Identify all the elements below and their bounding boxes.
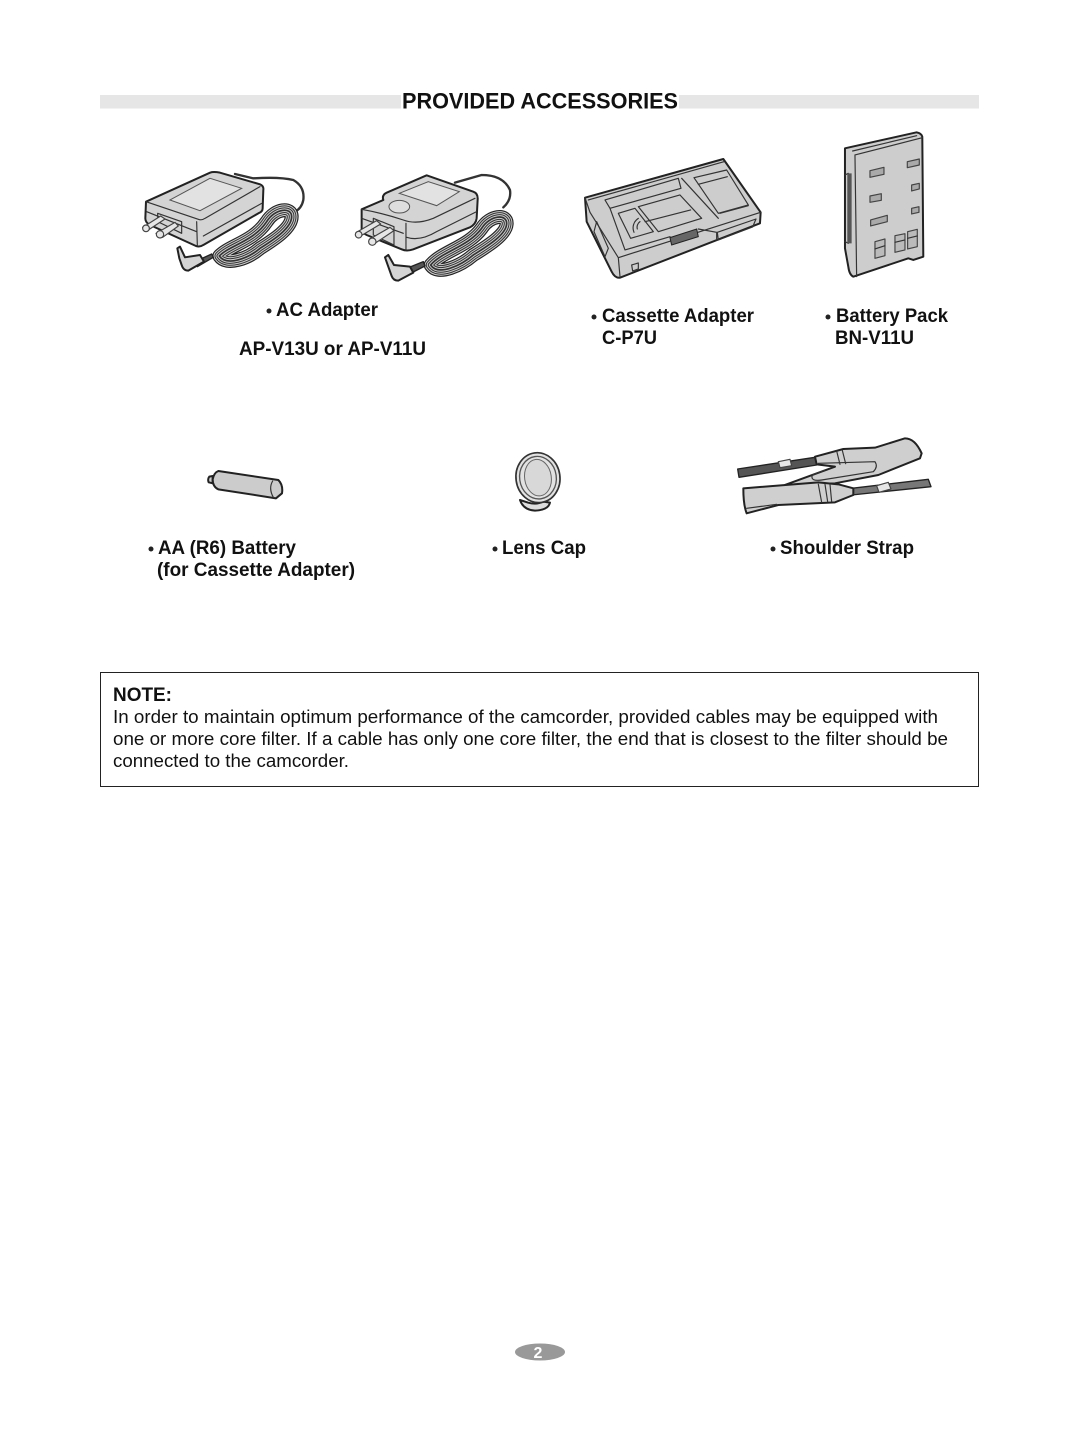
label: AC adapter: AP-V13U or AP-V11U	[239, 339, 426, 360]
label: lens cap: Lens Cap	[502, 538, 586, 559]
label: AC adapter	[239, 300, 426, 360]
heading: PROVIDED ACCESSORIES	[402, 88, 678, 114]
label: shoulder strap: Shoulder Strap	[780, 538, 914, 559]
icon: shoulder strap	[738, 438, 931, 513]
label: cassette adapter	[592, 306, 755, 349]
icon: AA battery	[208, 471, 282, 498]
icon: AC adapter AP-V13U	[143, 172, 304, 271]
page number: 2	[534, 1345, 543, 1362]
label: battery pack: BN-V11U	[835, 328, 914, 349]
label: battery pack: Battery Pack	[836, 306, 948, 327]
icon: lens cap	[513, 450, 563, 511]
page number	[515, 1344, 565, 1362]
label: battery pack	[826, 306, 948, 349]
title bar	[100, 88, 979, 114]
label: cassette adapter: Cassette Adapter	[602, 306, 755, 327]
icon: cassette adapter	[585, 159, 761, 278]
icon: battery pack	[845, 132, 923, 277]
note text: one or more core filter. If a cable has only one core filter, the end that is closest to the filter should be	[113, 728, 948, 749]
note text: In order to maintain optimum performance of the camcorder, provided cables may be equipped with	[113, 706, 938, 727]
note text: connected to the camcorder.	[113, 750, 349, 771]
label: AA battery: AA (R6) Battery	[158, 538, 296, 559]
note text	[113, 706, 948, 771]
label: AA battery: (for Cassette Adapter)	[157, 560, 355, 581]
label: AA battery	[148, 538, 355, 581]
note heading: NOTE:	[113, 685, 172, 706]
label: AC adapter: AC Adapter	[276, 300, 379, 321]
label: cassette adapter: C-P7U	[602, 328, 657, 349]
icon: AC adapter AP-V11U	[355, 175, 510, 281]
panel: note	[100, 672, 978, 786]
